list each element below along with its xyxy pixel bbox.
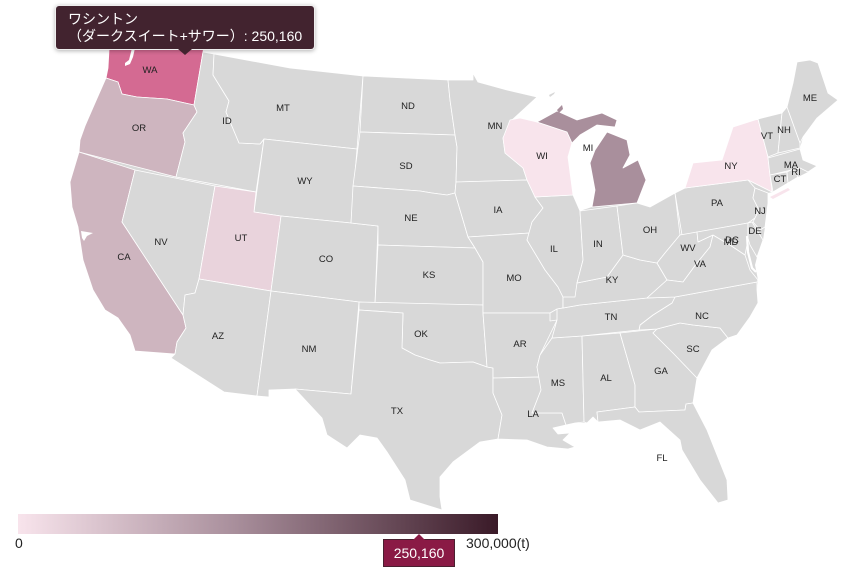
state: Nebraska <box>351 186 475 248</box>
tooltip: Washington: ワシントン <box>68 11 138 27</box>
state labels: WA <box>143 65 158 76</box>
state: Montana <box>213 54 363 149</box>
Puget Sound <box>125 48 135 66</box>
state: Nevada <box>122 170 215 315</box>
state labels: NC <box>695 311 709 322</box>
Chesapeake Bay <box>747 236 756 272</box>
legend: colour scale <box>15 514 530 567</box>
state labels: NV <box>154 237 168 248</box>
state: Maryland <box>697 223 748 255</box>
state: Connecticut <box>770 172 788 192</box>
state labels: ND <box>401 101 415 112</box>
state: California <box>70 152 186 354</box>
state: Indiana <box>577 206 623 283</box>
state labels: GA <box>654 366 669 377</box>
state: Alabama <box>582 333 635 423</box>
state labels: TN <box>605 312 617 323</box>
state labels: WY <box>297 176 313 187</box>
value marker: 250,160 <box>394 545 444 561</box>
state: Delaware and Delmarva <box>748 222 763 257</box>
state: New Hampshire <box>778 107 800 153</box>
state labels: PA <box>711 198 724 209</box>
state: South Carolina <box>653 323 728 378</box>
state labels: UT <box>235 233 248 244</box>
state: Idaho <box>176 52 264 192</box>
state: Wyoming <box>254 139 357 223</box>
state: Florida <box>597 403 728 503</box>
state labels: NM <box>302 344 316 355</box>
scale minimum: 0 <box>15 535 23 551</box>
state labels: OH <box>643 225 657 236</box>
state labels: VA <box>694 259 707 270</box>
state: Louisiana <box>493 377 575 449</box>
state: Utah <box>199 186 281 291</box>
state: Texas <box>295 310 502 510</box>
state labels: IA <box>494 205 503 216</box>
state labels: NE <box>404 213 418 224</box>
state: Colorado <box>271 216 378 304</box>
state: North Dakota <box>360 76 455 135</box>
state labels: IN <box>593 239 603 250</box>
state labels: KY <box>606 275 619 286</box>
state labels: FL <box>656 453 668 464</box>
state labels: WI <box>536 151 548 162</box>
state: Oregon <box>79 78 197 177</box>
state: Massachusetts <box>768 149 817 175</box>
scale maximum: 300,000(t) <box>466 535 530 551</box>
state labels: MD <box>724 237 739 248</box>
tooltip: Washington <box>56 6 314 49</box>
state labels: DE <box>748 226 762 237</box>
state labels: MA <box>784 160 799 171</box>
state: Kentucky <box>563 255 667 308</box>
state: New Mexico <box>257 291 359 397</box>
state labels: RI <box>791 167 801 178</box>
state: Pennsylvania <box>675 180 759 235</box>
state labels: NY <box>724 161 738 172</box>
state labels: MN <box>488 121 503 132</box>
state labels: IL <box>550 244 558 255</box>
state labels: SC <box>686 344 700 355</box>
state: Iowa <box>455 180 543 237</box>
state labels: ID <box>222 116 232 127</box>
state labels: MO <box>506 273 522 284</box>
state labels: KS <box>423 270 435 281</box>
state labels: NH <box>777 125 791 136</box>
Long Island <box>770 188 790 199</box>
state labels: AR <box>513 339 527 350</box>
gradient bar <box>18 514 498 534</box>
state group <box>70 40 838 510</box>
state labels: DC <box>725 235 739 246</box>
state: Tennessee <box>552 297 675 338</box>
value marker <box>383 539 455 567</box>
Isle Royale <box>557 105 563 113</box>
state labels: VT <box>761 131 773 142</box>
state labels: SD <box>399 161 413 172</box>
state: Ohio <box>617 193 680 263</box>
state labels: NJ <box>754 206 766 217</box>
state: Virginia <box>647 235 758 298</box>
state: Kansas <box>375 245 483 305</box>
state: Arkansas <box>483 313 557 378</box>
state: Illinois <box>527 195 583 297</box>
state: Minnesota <box>448 73 537 182</box>
state labels <box>117 65 817 464</box>
state: Rhode Island <box>787 169 798 183</box>
state labels: TX <box>391 406 404 417</box>
state labels: CA <box>117 252 131 263</box>
state labels: AL <box>600 373 612 384</box>
state labels: ME <box>803 93 817 104</box>
state: West Virginia <box>657 232 713 282</box>
state: North Carolina <box>639 282 758 338</box>
state: Washington <box>106 40 205 105</box>
state labels: LA <box>527 409 539 420</box>
state labels: MS <box>551 378 565 389</box>
state: Arizona <box>171 279 271 396</box>
island in Lake Superior <box>549 92 555 97</box>
state: New Jersey <box>753 188 768 230</box>
state labels: CO <box>319 254 333 265</box>
San Francisco Bay <box>81 231 93 241</box>
state labels: OR <box>132 123 146 134</box>
state: Michigan lower peninsula <box>590 132 646 207</box>
state labels: WV <box>680 243 696 254</box>
state: New York <box>685 119 772 192</box>
state: Oklahoma <box>359 302 487 367</box>
state: South Dakota <box>353 132 457 195</box>
state: Missouri <box>468 233 563 313</box>
state labels: MI <box>583 143 593 154</box>
state labels: MT <box>276 103 290 114</box>
state: Michigan upper peninsula <box>537 111 617 143</box>
state labels: OK <box>414 329 429 340</box>
tooltip: Washington: （ダークスイート+サワー）: 250,160 <box>68 28 302 44</box>
state labels: CT <box>774 174 787 185</box>
state: Wisconsin <box>503 118 573 197</box>
state: Georgia <box>620 329 697 412</box>
state labels: AZ <box>212 331 224 342</box>
state: Vermont <box>758 113 782 157</box>
state: Mississippi <box>532 336 584 425</box>
state: Maine <box>787 60 838 143</box>
land silhouette <box>70 40 838 510</box>
